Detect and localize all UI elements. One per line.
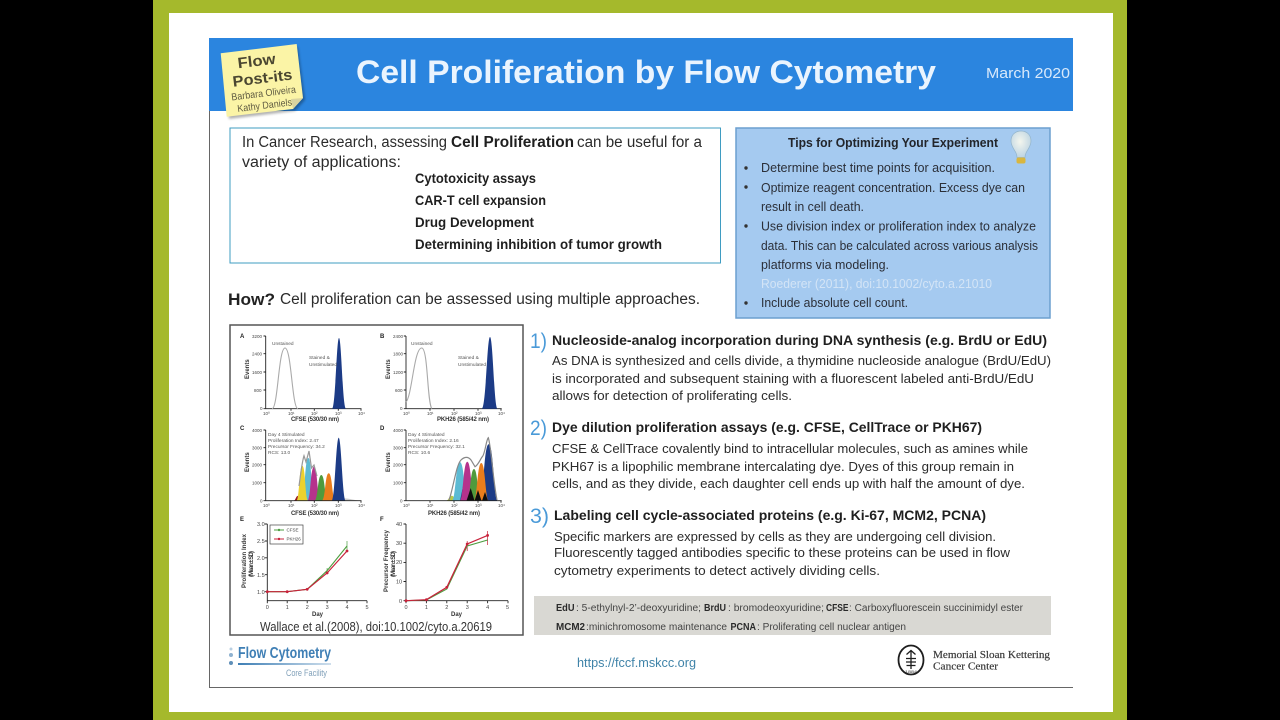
intro box: variety of applications:: [242, 154, 401, 171]
plot C: CFSE stimulated: 10³: [335, 503, 342, 508]
abbreviations glossary: CFSE: [826, 603, 849, 614]
plot B: PKH26 histogram: B: [380, 334, 385, 340]
plot B: PKH26 histogram: 0: [400, 406, 403, 411]
plot F: precursor frequency line chart: Day: [451, 612, 463, 618]
plot C: CFSE stimulated: 4000: [252, 428, 263, 433]
plot A: CFSE histogram: CFSE (530/30 nm): [291, 417, 339, 423]
tips list: result in cell death.: [761, 200, 864, 214]
logo: Flow Cytometry Core Facility: [229, 645, 331, 679]
plot A: CFSE histogram: Stained &: [309, 355, 331, 361]
plot E: proliferation index line chart: (Mean ± SD): [249, 551, 255, 577]
plot F: precursor frequency line chart: 0: [404, 605, 408, 611]
plot C: CFSE stimulated: C: [240, 426, 245, 432]
plot E: proliferation index line chart: 2: [306, 605, 309, 611]
abbreviations glossary: [534, 596, 1051, 635]
abbreviations glossary: : 5-ethylnyl-2’-deoxyuridine;: [576, 603, 701, 614]
approach 3: cell cycle proteins: Specific markers are expressed by cells as they are undergoing cell division.: [554, 529, 996, 544]
sticky note: Flow Post-its: Kathy Daniels: [237, 97, 293, 115]
abbreviations glossary: MCM2: [556, 622, 585, 633]
approach 1: nucleoside analog: allows for detection of proliferating cells.: [552, 388, 792, 403]
intro box: can be useful for a: [577, 134, 702, 151]
plot D: PKH26 stimulated: Day 4 Stimulated: [408, 432, 445, 438]
plot A: CFSE histogram: 10¹: [288, 411, 295, 416]
plot A: CFSE histogram: 10⁰: [263, 411, 270, 416]
approach 3: cell cycle proteins: 3): [530, 505, 549, 528]
plot D: PKH26 stimulated: Precursor Frequency: 32.1: [408, 444, 465, 450]
tips list: Determine best time points for acquisition.: [761, 161, 995, 175]
plot D: PKH26 stimulated: PKH26 (585/42 nm): [428, 511, 480, 517]
plot E: proliferation index line chart: CFSE: [286, 528, 299, 532]
plot A: CFSE histogram: Events: [245, 359, 251, 379]
abbreviations glossary: : Carboxyfluorescein succinimidyl ester: [849, 603, 1024, 614]
logo: Flow Cytometry Core Facility: Flow Cytometry: [238, 645, 331, 662]
list of applications: Drug Development: [415, 215, 534, 230]
tips list: platforms via modeling.: [761, 258, 889, 272]
plot D: PKH26 stimulated: Events: [386, 452, 392, 472]
plot E: proliferation index line chart: 3.0: [257, 522, 265, 528]
plot A: CFSE histogram: 10²: [311, 411, 318, 416]
plot C: CFSE stimulated: 10⁰: [263, 503, 270, 508]
abbreviations glossary: : Proliferating cell nuclear antigen: [757, 622, 906, 633]
plot E: proliferation index line chart: 1: [286, 605, 289, 611]
plot E: proliferation index line chart: Day: [312, 612, 324, 618]
plot B: PKH26 histogram: [380, 334, 505, 423]
plot F: precursor frequency line chart: 1: [425, 605, 428, 611]
how heading: Cell proliferation can be assessed using multiple approaches.: [280, 291, 700, 308]
plot B: PKH26 histogram: Unstained: [411, 341, 433, 347]
list of applications: Cytotoxicity assays: [415, 171, 536, 186]
plot C: CFSE stimulated: 1000: [252, 480, 263, 486]
plot C: CFSE stimulated: 0: [260, 498, 263, 504]
figure citation: Wallace et al.(2008), doi:10.1002/cyto.a.20619: [260, 619, 492, 634]
plot E: proliferation index line chart: 1.0: [257, 590, 265, 596]
plot E: proliferation index line chart: 4: [346, 605, 349, 611]
plot A: CFSE histogram: 800: [254, 388, 262, 393]
icon: light bulb: [1011, 131, 1031, 164]
plot F: precursor frequency line chart: [380, 517, 509, 618]
plot B: PKH26 histogram: 1200: [393, 370, 404, 375]
intro box: In Cancer Research, assessing: [242, 134, 447, 151]
abbreviations glossary: : bromodeoxyuridine;: [728, 603, 824, 614]
plot F: precursor frequency line chart: 5: [506, 605, 509, 611]
plot A: CFSE histogram: 2400: [252, 352, 263, 356]
approach 2: dye dilution: PKH67 is a lipophilic membrane intercalating dye. Dyes of this group remain in: [552, 459, 1014, 474]
logo: Memorial Sloan Kettering: [898, 646, 1050, 674]
sticky note: Flow Post-its: Post-its: [232, 66, 293, 91]
plot C: CFSE stimulated: Precursor Frequency: 34.2: [268, 444, 325, 450]
approach 2: dye dilution: [530, 417, 1028, 491]
plot E: proliferation index line chart: 3: [326, 605, 329, 611]
plot A: CFSE histogram: 3200: [252, 334, 263, 339]
plot C: CFSE stimulated: RCS: 13.0: [268, 450, 290, 456]
plot F: precursor frequency line chart: 0: [399, 599, 402, 605]
abbreviations glossary: EdU: [556, 603, 574, 614]
how heading: How?: [228, 290, 275, 309]
plot D: PKH26 stimulated: 10³: [475, 503, 482, 508]
list of applications: CAR-T cell expansion: [415, 193, 546, 208]
plot B: PKH26 histogram: 600: [395, 388, 403, 393]
plot D: PKH26 stimulated: Proliferation Index: 2.16: [408, 438, 459, 444]
logo: Memorial Sloan Kettering: Cancer Center: [933, 660, 998, 672]
date: March 2020: [986, 65, 1070, 82]
title: Cell Proliferation by Flow Cytometry: [356, 54, 936, 90]
website link: https://fccf.mskcc.org: [577, 655, 696, 670]
plot C: CFSE stimulated: 10¹: [288, 503, 295, 508]
tips list: Optimize reagent concentration. Excess dye can: [761, 181, 1025, 195]
tips list: Roederer (2011), doi:10.1002/cyto.a.21010: [761, 277, 992, 291]
plot E: proliferation index line chart: 0: [266, 605, 269, 611]
approach 2: dye dilution: Dye dilution proliferation assays (e.g. CFSE, CellTrace or PKH67): [552, 420, 982, 435]
plot D: PKH26 stimulated: 10⁰: [403, 503, 410, 508]
plot E: proliferation index line chart: E: [240, 517, 244, 523]
plot A: CFSE histogram: [240, 334, 365, 423]
approach 2: dye dilution: CFSE & CellTrace covalently bind to intracellular molecules, such as amines while: [552, 441, 1028, 456]
approach 1: nucleoside analog: Nucleoside-analog incorporation during DNA synthesis (e.g. BrdU or EdU): [552, 333, 1047, 348]
plot A: CFSE histogram: Unstained: [272, 341, 294, 347]
approach 1: nucleoside analog: 1): [530, 330, 547, 353]
plot C: CFSE stimulated: 2000: [252, 462, 263, 468]
plot A: CFSE histogram: 1600: [252, 370, 263, 375]
header banner: [209, 38, 1073, 111]
intro box: Cell Proliferation: [451, 134, 574, 151]
plot B: PKH26 histogram: 1800: [393, 352, 404, 356]
approach 3: cell cycle proteins: cytometry experiments to detect actively dividing cells.: [554, 563, 880, 578]
plot C: CFSE stimulated: 3000: [252, 446, 263, 450]
list of applications: Determining inhibition of tumor growth: [415, 237, 662, 252]
plot F: precursor frequency line chart: 30: [396, 541, 402, 547]
sticky note: Flow Post-its: Flow: [237, 51, 277, 72]
plot D: PKH26 stimulated: 0: [400, 498, 403, 504]
logo: Flow Cytometry Core Facility: Core Facility: [286, 668, 327, 679]
logo: Memorial Sloan Kettering: 1884: [905, 670, 917, 674]
plot C: CFSE stimulated: [240, 426, 365, 517]
plot A: CFSE histogram: 10⁴: [358, 411, 365, 416]
plot F: precursor frequency line chart: F: [380, 517, 384, 523]
approach 3: cell cycle proteins: Fluorescently tagged antibodies specific to these proteins can be used in flow: [554, 545, 1010, 560]
approach 1: nucleoside analog: is incorporated and subsequent staining with a fluorescent labeled anti-BrdU/EdU: [552, 371, 1034, 386]
plot D: PKH26 stimulated: 10¹: [427, 503, 434, 508]
plot B: PKH26 histogram: 10⁴: [498, 411, 505, 416]
plot C: CFSE stimulated: Events: [245, 452, 251, 472]
list of applications: [415, 171, 662, 252]
tips list: Include absolute cell count.: [761, 296, 908, 310]
plot D: PKH26 stimulated: 10²: [451, 503, 458, 508]
logo: Memorial Sloan Kettering: Memorial Sloan Kettering: [933, 649, 1050, 661]
plot D: PKH26 stimulated: D: [380, 426, 385, 432]
sticky note: Flow Post-its: Barbara Oliveira: [231, 85, 297, 103]
plot B: PKH26 histogram: 2400: [393, 334, 404, 339]
tips list: data. This can be calculated across various analysis: [761, 239, 1038, 253]
approach 2: dye dilution: 2): [530, 417, 547, 440]
plot A: CFSE histogram: 10³: [335, 411, 342, 416]
approach 2: dye dilution: cells, and as they divide, each daughter cell ends up with half the amount of dye.: [552, 476, 1025, 491]
figure panel: flow cytometry plots: [230, 325, 523, 635]
plot E: proliferation index line chart: [240, 517, 369, 618]
plot C: CFSE stimulated: CFSE (530/30 nm): [291, 511, 339, 517]
plot C: CFSE stimulated: 10²: [311, 503, 318, 508]
plot C: CFSE stimulated: Proliferation Index: 2.47: [268, 438, 319, 444]
abbreviations glossary: :minichromosome maintenance: [586, 622, 727, 633]
approach 1: nucleoside analog: [530, 330, 1051, 403]
plot D: PKH26 stimulated: 10⁴: [498, 503, 505, 508]
abbreviations glossary: BrdU: [704, 603, 726, 614]
approach 3: cell cycle proteins: Labeling cell cycle-associated proteins (e.g. Ki-67, MCM2, PCNA): [554, 508, 986, 523]
plot D: PKH26 stimulated: 3000: [393, 446, 404, 450]
plot E: proliferation index line chart: 2.5: [257, 539, 265, 545]
intro box: [230, 128, 720, 263]
plot F: precursor frequency line chart: (Mean ± SD): [391, 551, 397, 577]
plot F: precursor frequency line chart: 3: [466, 605, 469, 611]
plot B: PKH26 histogram: 10³: [475, 411, 482, 416]
plot A: CFSE histogram: A: [240, 334, 245, 340]
plot A: CFSE histogram: 0: [260, 406, 263, 411]
plot D: PKH26 stimulated: [380, 426, 505, 517]
plot F: precursor frequency line chart: 10: [396, 580, 402, 586]
plot D: PKH26 stimulated: 1000: [393, 480, 404, 486]
tips list: [744, 161, 1038, 310]
plot B: PKH26 histogram: 10¹: [427, 411, 434, 416]
plot E: proliferation index line chart: Proliferation Index: [242, 533, 248, 588]
plot A: CFSE histogram: Unstimulated: [309, 362, 337, 368]
plot E: proliferation index line chart: 2.0: [257, 556, 265, 562]
plot B: PKH26 histogram: 10⁰: [403, 411, 410, 416]
plot C: CFSE stimulated: 10⁴: [358, 503, 365, 508]
plot B: PKH26 histogram: PKH26 (585/42 nm): [437, 417, 489, 423]
plot F: precursor frequency line chart: 2: [445, 605, 448, 611]
approach 3: cell cycle proteins: [530, 505, 1010, 578]
abbreviations glossary: PCNA: [730, 622, 756, 633]
tips heading: Tips for Optimizing Your Experiment: [788, 135, 999, 150]
tips list: Use division index or proliferation index to analyze: [761, 220, 1036, 234]
plot D: PKH26 stimulated: 2000: [393, 462, 404, 468]
plot E: proliferation index line chart: 1.5: [257, 573, 265, 579]
plot B: PKH26 histogram: Unstimulated: [458, 362, 486, 368]
plot E: proliferation index line chart: PKH26: [286, 536, 301, 542]
plot D: PKH26 stimulated: RCS: 10.6: [408, 450, 430, 456]
plot C: CFSE stimulated: Day 4 Stimulated: [268, 432, 305, 438]
plot F: precursor frequency line chart: Precursor Frequency: [384, 529, 390, 592]
tips panel: [736, 128, 1050, 318]
plot B: PKH26 histogram: Events: [386, 359, 392, 379]
plot B: PKH26 histogram: Stained &: [458, 355, 480, 361]
approach 1: nucleoside analog: As DNA is synthesized and cells divide, a thymidine nucleoside analogue (BrdU/EdU): [552, 353, 1051, 368]
plot D: PKH26 stimulated: 4000: [393, 428, 404, 433]
plot B: PKH26 histogram: 10²: [451, 411, 458, 416]
plot F: precursor frequency line chart: 20: [396, 560, 402, 566]
plot F: precursor frequency line chart: 4: [486, 605, 489, 611]
plot E: proliferation index line chart: 5: [366, 605, 369, 611]
plot F: precursor frequency line chart: 40: [396, 522, 402, 528]
sticky note: Flow Post-its: [221, 44, 305, 119]
